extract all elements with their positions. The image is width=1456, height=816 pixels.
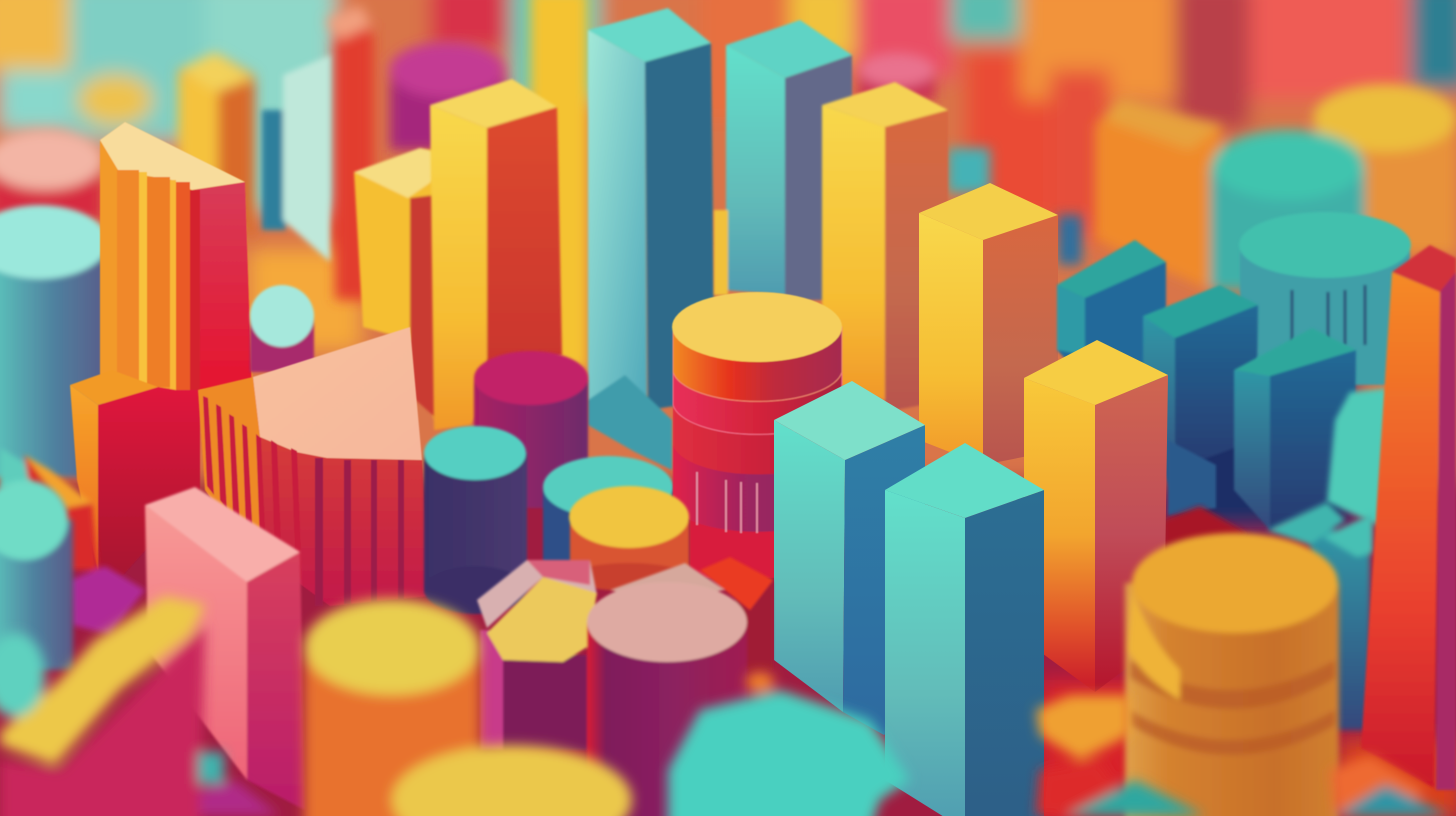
cylinder: teal bottom left — [0, 633, 45, 717]
box: yellow and brown tower right of centre — [919, 183, 1058, 465]
cylinder: orange and yellow small — [569, 486, 689, 591]
cylinder: teal bottom centre — [668, 690, 910, 816]
box: yellow torn top and crimson body — [0, 596, 205, 816]
top — [672, 292, 842, 362]
cylinder: central stacked red and yellow — [672, 292, 842, 578]
box: dark blue stub — [1168, 440, 1216, 516]
box: yellow and red tall tower — [430, 79, 562, 430]
foreground: small left blocks — [0, 448, 145, 635]
tower: red back — [325, 5, 372, 300]
cylinder: ribbed teal right — [1239, 212, 1411, 385]
cylinder: magenta back — [389, 42, 505, 150]
cylinder: dark navy with teal top — [424, 426, 527, 614]
tower: yellow behind — [530, 0, 588, 370]
cylinder: teal top behind yellow — [543, 456, 673, 562]
cylinder: teal large at left — [0, 205, 110, 477]
small magenta bottom left — [198, 752, 280, 816]
box: blue right block two — [1143, 285, 1258, 500]
cylinder: magenta centre — [474, 351, 588, 508]
slab: pale top behind cylinder — [610, 563, 725, 600]
cylinder: yellow foreground — [304, 599, 480, 816]
cylinder: teal behind right — [1327, 388, 1388, 530]
wedge: fan shaped ridged block — [198, 327, 430, 606]
ring two — [673, 372, 842, 434]
box: yellow and rose tall right — [1024, 340, 1168, 692]
box: orange far right — [1361, 245, 1456, 790]
cylinder: teal small left — [250, 285, 314, 372]
cylinder: stacked orange right foreground — [1125, 533, 1339, 816]
base — [690, 520, 780, 578]
background: soft mid-distance shapes — [0, 0, 1456, 370]
box: red right of pentagon — [735, 580, 773, 672]
box: yellow and red tower centre-left — [354, 148, 436, 420]
orange scattered bottom right — [746, 672, 1425, 816]
ring one — [673, 327, 842, 401]
cylinder: pink-red left back — [0, 130, 103, 220]
box: orange right back — [1095, 98, 1222, 290]
cylinder: teal left foreground — [0, 480, 73, 670]
box: mint and slate tower — [714, 20, 852, 300]
box: yellow and orange-brown tower — [822, 82, 948, 412]
box: magenta pentagon block — [480, 630, 506, 750]
box: teal and blue block three — [1234, 328, 1356, 530]
box: tall teal and dark blue tower — [588, 8, 715, 470]
slab: dark red behind orange cylinder — [1163, 506, 1250, 545]
box: pink foreground tall — [145, 487, 305, 810]
foreground: heavily blurred shapes — [0, 596, 1450, 816]
box: orange-red lower — [97, 387, 200, 575]
cylinder: pink small back — [859, 53, 935, 100]
cylinder: rose with magenta body — [587, 622, 747, 816]
ribbed ring — [673, 445, 842, 533]
slab: pale pink behind — [477, 560, 597, 628]
box: pale mint tower back-left — [262, 55, 330, 262]
ring three — [673, 405, 842, 474]
box: blue right block one — [1057, 240, 1166, 400]
tower: yellow-orange back left — [178, 52, 255, 240]
box: small teal behind — [948, 148, 1082, 265]
box: teal and blue front centre — [774, 381, 925, 735]
cylinder: yellow bottom centre — [392, 745, 632, 816]
central foreground shapes — [477, 557, 773, 816]
teal bottom right — [1065, 780, 1450, 816]
cylinder: yellow right back — [1313, 84, 1456, 253]
box group: ridged orange tower left — [70, 122, 253, 575]
box: teal and blue front tall — [885, 443, 1044, 816]
cylinder: teal right back — [1210, 130, 1365, 290]
box: teal stack right — [1267, 502, 1373, 730]
